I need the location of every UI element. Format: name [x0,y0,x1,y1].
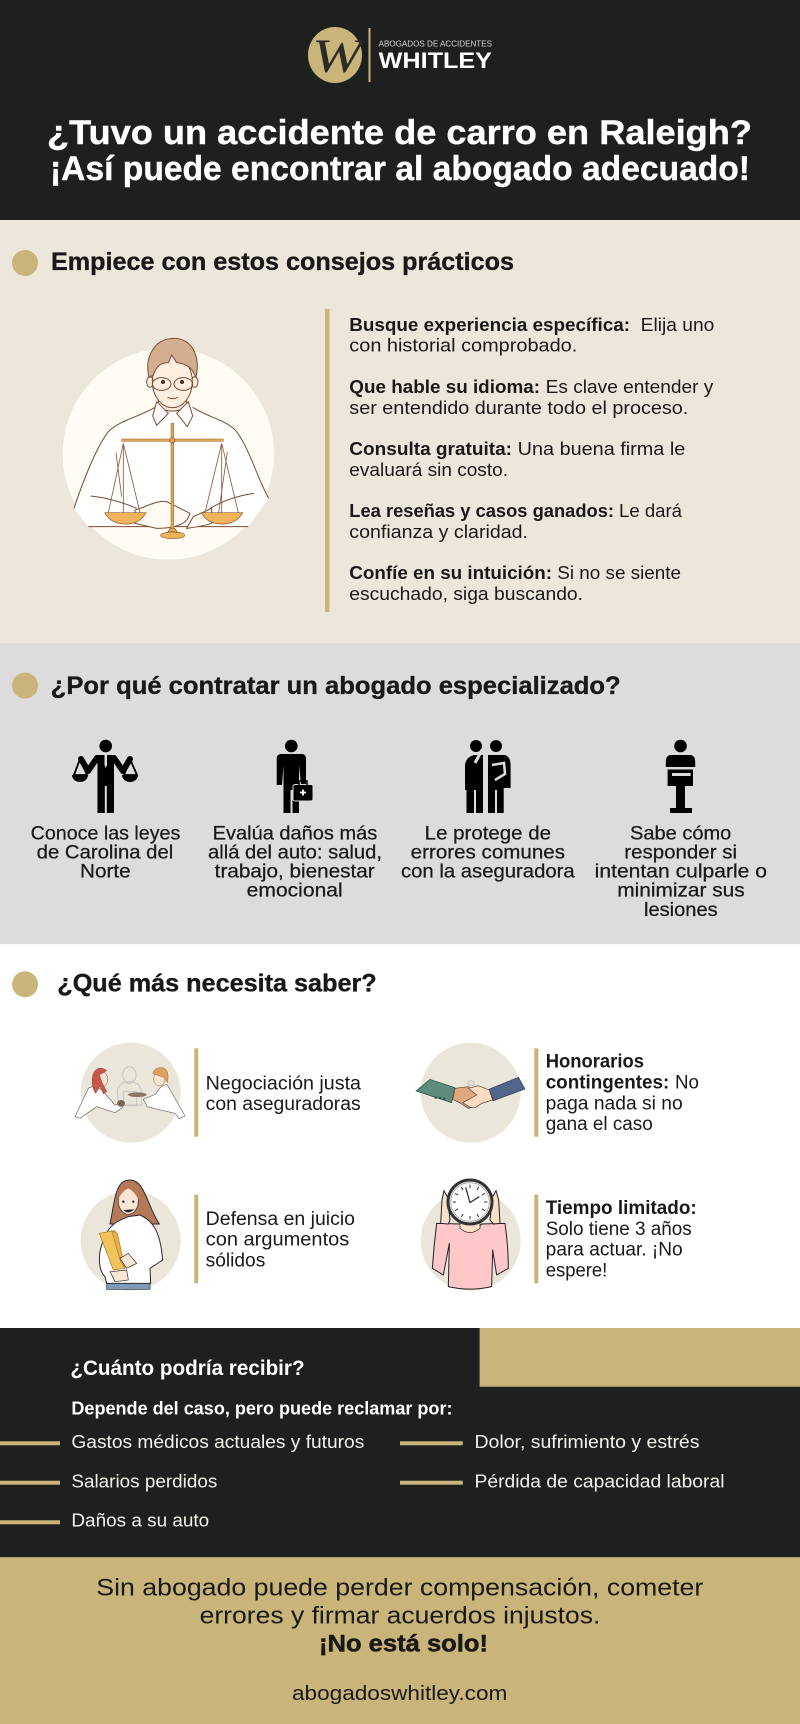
text bar [534,1048,538,1137]
illustration: handshake [416,1043,525,1143]
tips list: escuchado, siga buscando. [349,584,583,604]
text bar [194,1048,198,1137]
text: honorarios [546,1051,699,1135]
text: honorarios: gana el caso [546,1114,653,1135]
caption: leyes: Conoce las leyes [31,822,181,844]
title: ¿Tuvo un accidente de carro en Raleigh? [47,114,752,152]
caption: daños: allá del auto: salud, [208,842,382,864]
tips list: Elija uno [641,315,714,335]
text: tiempo limitado: Solo tiene 3 años [546,1219,692,1240]
panel: qué más necesita saber [0,944,800,1328]
panel: cuánto podría recibir [0,1328,800,1557]
text: defensa: Defensa en juicio [206,1209,355,1230]
text: tiempo limitado [546,1198,697,1282]
text: negociación: con aseguradoras [206,1094,361,1115]
illustration: woman with folder [81,1180,181,1291]
text: defensa: sólidos [206,1251,265,1272]
section heading: saber: ¿Qué más necesita saber? [57,970,377,998]
text: honorarios: No [675,1073,699,1094]
caption: aseguradora: errores comunes [411,842,565,864]
tips list: Lea reseñas y casos ganados: [349,501,614,521]
text: defensa [206,1209,355,1272]
closing message: Sin abogado puede perder compensación, cometer [96,1575,703,1602]
caption: leyes [31,822,181,883]
caption: responder: minimizar sus [617,880,745,902]
list: right column: Pérdida de capacidad laboral [474,1470,724,1491]
list: left column: Salarios perdidos [71,1470,217,1491]
illustration: clock person [421,1180,521,1291]
subheading: Depende del caso, pero puede reclamar por: [71,1399,452,1419]
caption: daños: emocional [247,880,343,902]
tips list: Que hable su idioma: [349,377,540,397]
tips list: Confíe en su intuición: [349,563,552,583]
caption: daños [208,822,382,902]
caption: aseguradora: con la aseguradora [401,861,575,883]
text: honorarios: Honorarios [546,1051,644,1072]
caption: responder [595,822,767,921]
panel: consejos prácticos [0,220,800,643]
text: defensa: con argumentos [206,1230,349,1251]
text: honorarios: paga nada si no [546,1093,683,1114]
list: left column: Gastos médicos actuales y futuros [71,1431,364,1452]
tips list: Es clave entender y [546,377,713,397]
caption: responder: responder si [624,842,737,864]
icon: man at podium [666,740,695,813]
text bar [194,1195,198,1283]
logo [308,27,492,83]
caption: daños: trabajo, bienestar [215,861,375,883]
tips list: con historial comprobado. [349,336,577,356]
text: tiempo limitado: Tiempo limitado: [546,1198,697,1219]
panel: header [0,0,800,220]
text: tiempo limitado: para actuar. ¡No [546,1240,683,1261]
caption: leyes: de Carolina del [37,842,173,864]
text: honorarios: contingentes: [546,1073,669,1094]
list: left column [0,1431,364,1531]
logo: WHITLEY [379,48,492,73]
caption: responder: intentan culparle o [595,861,767,883]
tips list: evaluará sin costo. [349,460,508,480]
website url: abogadoswhitley.com [292,1682,507,1705]
icon: man balancing scales [72,740,138,813]
caption: aseguradora [401,822,575,883]
logo: W [312,30,367,83]
accent bar [325,309,330,612]
text: negociación [206,1073,361,1115]
section heading: consejos: Empiece con estos consejos prácticos [51,248,514,276]
panel: closing call to action [0,1557,800,1724]
caption: aseguradora: Le protege de [425,822,551,844]
list: right column: Dolor, sufrimiento y estrés [474,1431,700,1452]
caption: responder: Sabe cómo [630,822,731,844]
text: tiempo limitado: espere! [546,1261,607,1282]
tips list: ser entendido durante todo el proceso. [349,398,688,418]
text bar [534,1195,538,1283]
tips list: Si no se siente [557,563,681,583]
icon: man with medical case [277,740,313,813]
text: negociación: Negociación justa [206,1073,361,1094]
gold corner block [480,1328,800,1387]
list: left column: Daños a su auto [71,1510,209,1531]
caption: responder: lesiones [644,899,718,921]
closing message: ¡No está solo! [319,1631,488,1658]
list: right column [400,1431,724,1491]
title [47,114,752,188]
illustration: negotiation [75,1043,185,1143]
closing message [96,1575,703,1658]
closing message: errores y firmar acuerdos injustos. [200,1602,600,1629]
section heading: por qué: ¿Por qué contratar un abogado especializado? [51,672,621,700]
tips list: Le dará [619,501,683,521]
logo: ABOGADOS DE ACCIDENTES [379,38,492,48]
panel: por qué contratar [0,643,800,944]
title: ¡Así puede encontrar al abogado adecuado! [50,150,750,188]
icon: two men consulting [465,740,511,813]
tips list: confianza y claridad. [349,522,528,542]
tips list: Busque experiencia específica: [349,315,630,335]
caption: leyes: Norte [80,861,131,883]
tips list: Una buena firma le [518,439,685,459]
heading: cuánto: ¿Cuánto podría recibir? [70,1357,305,1380]
tips list [349,315,714,604]
caption: daños: Evalúa daños más [213,822,378,844]
illustration: lawyer with scales [63,338,274,560]
tips list: Consulta gratuita: [349,439,512,459]
